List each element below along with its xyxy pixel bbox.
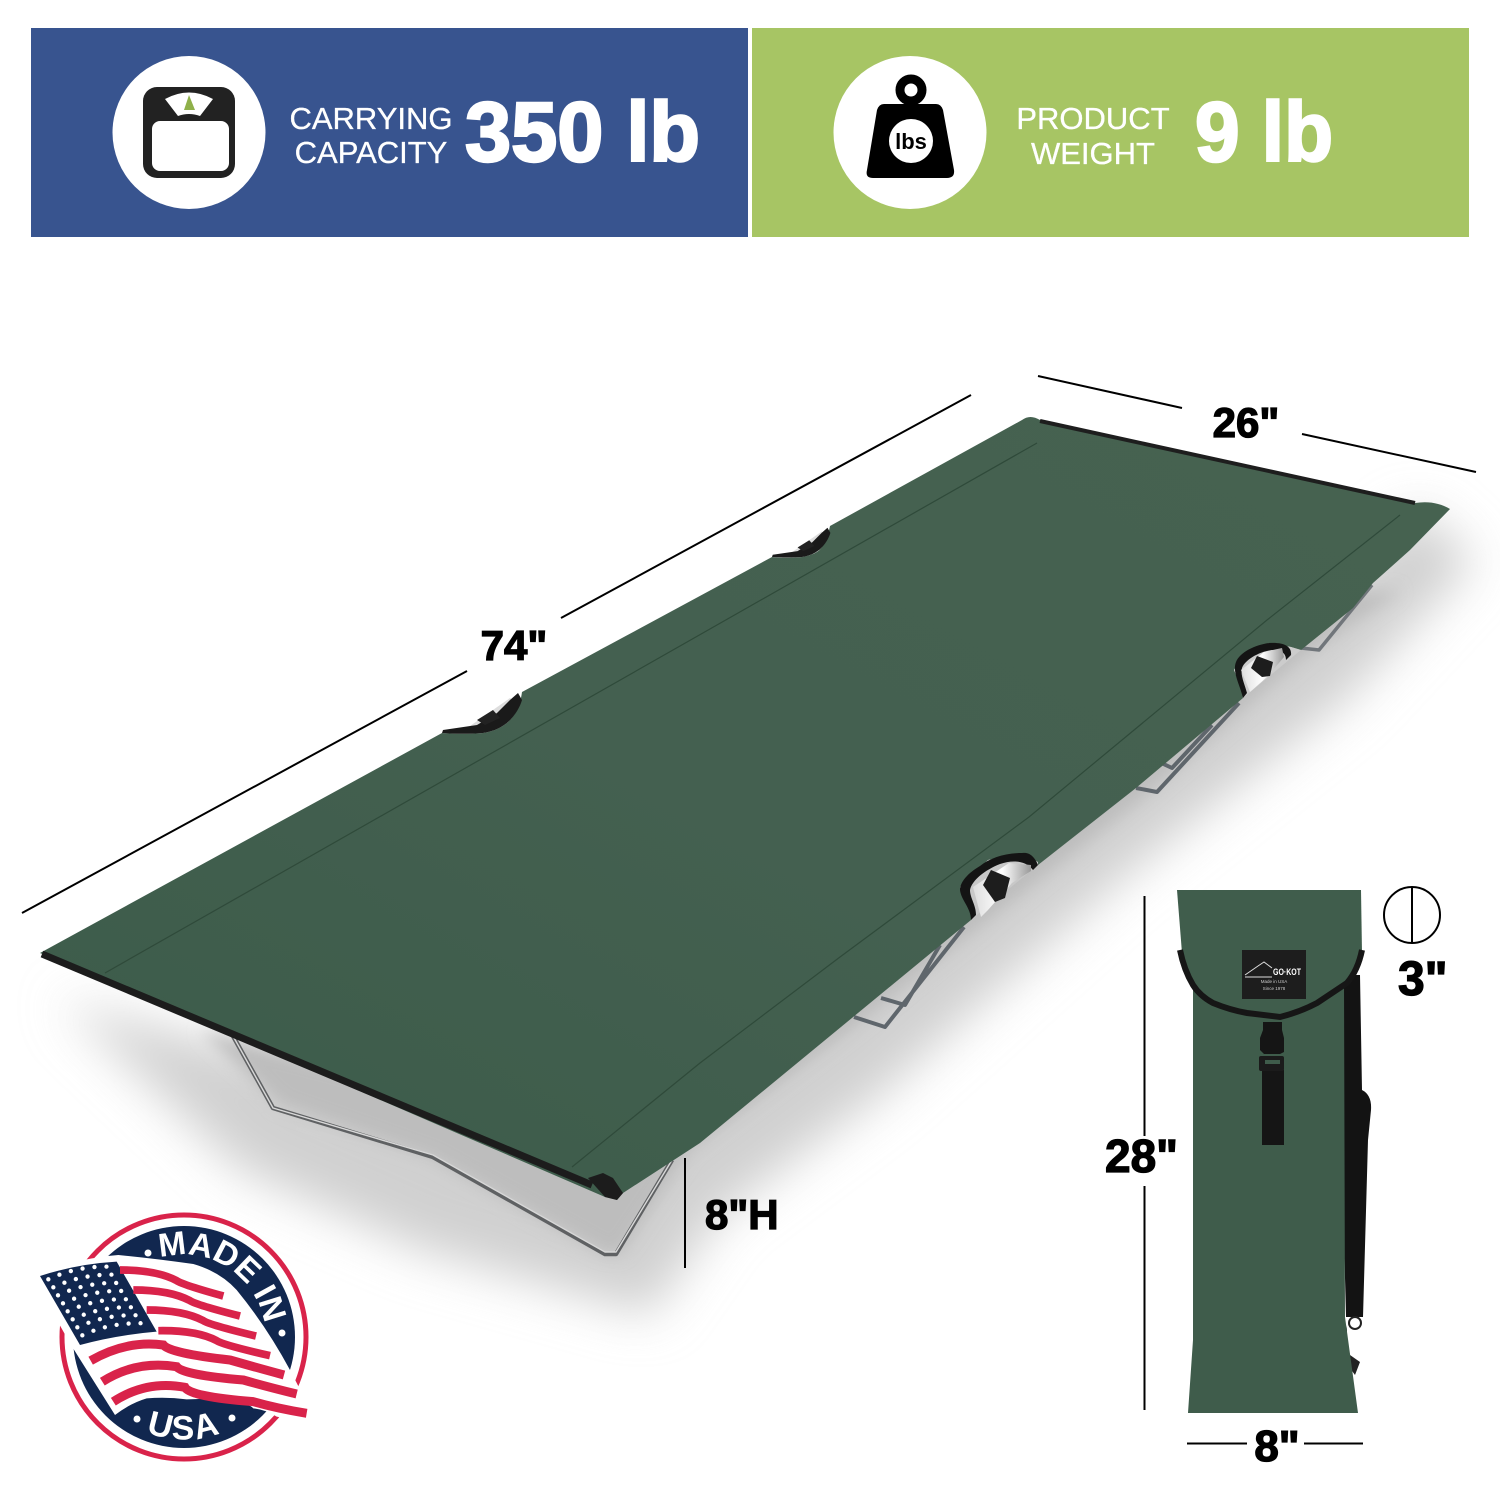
dimension: 28 inch bag length: 28" bbox=[1105, 1130, 1178, 1182]
dimension: 8 inch bag width: 8" bbox=[1254, 1422, 1300, 1471]
cot frame legs bbox=[233, 585, 1372, 1254]
dimension: 74 inch length: 74" bbox=[481, 622, 547, 669]
value: 9 lb: 9 lb bbox=[1195, 85, 1333, 179]
brand label: GO·KOT bbox=[1273, 967, 1301, 977]
flap binding bbox=[1180, 950, 1362, 1017]
label: product weight: WEIGHT bbox=[1031, 136, 1155, 171]
label: product weight: PRODUCT bbox=[1016, 101, 1170, 136]
buckle and webbing bbox=[1259, 1022, 1284, 1145]
bag strap bbox=[1343, 975, 1371, 1375]
top handle two bbox=[772, 528, 830, 558]
panel: carrying capacity bbox=[31, 28, 748, 237]
label: carrying capacity: CAPACITY bbox=[295, 135, 447, 170]
dimension: 8 inch height bbox=[685, 1158, 779, 1268]
far side clip bbox=[1234, 643, 1301, 698]
badge: made in USA bbox=[40, 1212, 308, 1462]
dimension: 8 inch height: 8"H bbox=[705, 1191, 779, 1238]
icon: weight bbox=[834, 56, 986, 209]
bag body bbox=[1188, 980, 1358, 1413]
brand label: Made in USA bbox=[1261, 979, 1287, 984]
dimension: 26 inch width bbox=[1038, 376, 1476, 472]
bag flap bbox=[1177, 890, 1362, 1017]
icon: bathroom scale bbox=[112, 56, 266, 209]
panel: product weight bbox=[752, 28, 1469, 237]
near side clip bbox=[960, 853, 1038, 920]
american flag bbox=[32, 1255, 318, 1425]
brand label bbox=[1242, 950, 1306, 999]
cot shadow bbox=[60, 510, 1475, 1315]
label: carrying capacity: CARRYING bbox=[289, 101, 453, 136]
badge text: made in: MADE IN bbox=[159, 1231, 286, 1322]
dimension: 3 inch bag diameter: 3" bbox=[1398, 953, 1447, 1006]
fabric seams bbox=[105, 443, 1400, 1167]
badge rings bbox=[62, 1215, 306, 1459]
cot bbox=[40, 417, 1450, 1200]
dimension: 74 inch length bbox=[22, 395, 971, 913]
black binding: foot and head bbox=[42, 954, 592, 1185]
top handle one bbox=[442, 693, 522, 734]
dimension: 26 inch width: 26" bbox=[1213, 399, 1279, 446]
cot fabric bbox=[40, 417, 1450, 1200]
value: 350 lb: 350 lb bbox=[465, 85, 700, 179]
badge dots bbox=[134, 1250, 286, 1422]
icon: weight: lbs bbox=[895, 129, 927, 154]
carry bag bbox=[1177, 890, 1371, 1413]
brand label: Since 1978 bbox=[1263, 986, 1286, 991]
dimension: 3 inch bag diameter bbox=[1384, 887, 1447, 1006]
badge text: USA: USA bbox=[150, 1411, 220, 1440]
